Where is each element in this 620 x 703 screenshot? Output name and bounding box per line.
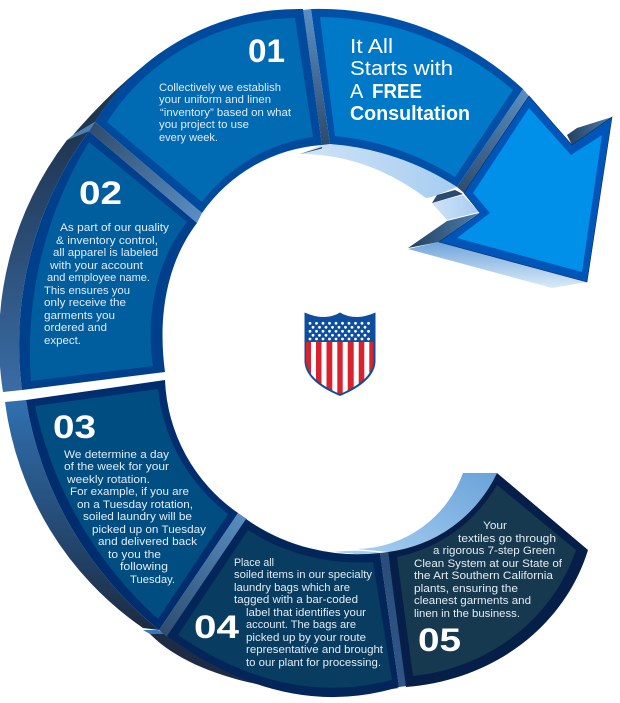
- heading: free consultation: Consultation: [350, 103, 470, 125]
- panel: step 04: [167, 519, 399, 697]
- text: step 03: of the week for your: [64, 461, 169, 473]
- step number 04: 04: [194, 609, 239, 645]
- text: step 05: cleanest garments and: [414, 595, 531, 607]
- text: step 02: expect.: [44, 335, 81, 347]
- text: step 03: For example, if you are: [70, 486, 189, 498]
- text: step 01: [159, 82, 292, 144]
- text: step 05: Clean System at our State of: [414, 558, 563, 570]
- step number 05: 05: [418, 622, 461, 658]
- text: step 04: [234, 557, 384, 669]
- text: step 02: all apparel is labeled: [53, 247, 158, 259]
- text: step 03: picked up on Tuesday: [92, 524, 206, 536]
- text: step 04: account. The bags are: [246, 619, 356, 631]
- text: step 02: This ensures you: [44, 285, 130, 297]
- text: step 05: [414, 520, 563, 620]
- text: step 02: [44, 222, 169, 347]
- text: step 04: soiled items in our specialty: [234, 569, 372, 581]
- arrow head: [439, 96, 612, 282]
- text: step 03: [64, 449, 206, 586]
- heading: free consultation: Starts with: [350, 58, 453, 80]
- heading: free consultation: FREE: [372, 81, 422, 103]
- text: step 04: label that identifies your: [246, 607, 366, 619]
- text: step 01: “inventory” based on what: [160, 107, 292, 119]
- panel: step 02: [19, 131, 197, 390]
- text: step 03: We determine a day: [64, 449, 169, 461]
- text: step 03: on a Tuesday rotation,: [77, 499, 193, 511]
- text: step 02: ordered and: [44, 322, 107, 334]
- text: step 05: plants, ensuring the: [414, 583, 518, 595]
- text: step 02: As part of our quality: [60, 222, 169, 234]
- text: step 04: picked up by your route: [246, 632, 366, 644]
- text: step 03: weekly rotation.: [66, 474, 150, 486]
- text: step 03: Tuesday.: [130, 574, 175, 586]
- step number 02: 02: [79, 175, 122, 211]
- panel: step 03: [26, 380, 238, 630]
- text: step 03: to you the: [108, 549, 161, 561]
- text: step 04: representative and brought: [246, 644, 384, 656]
- text: step 05: a rigorous 7-step Green: [433, 545, 555, 557]
- text: step 01: your uniform and linen: [159, 94, 271, 106]
- text: step 03: following: [120, 561, 168, 573]
- panel: free consultation: [311, 9, 523, 187]
- text: step 04: to our plant for processing.: [246, 657, 381, 669]
- text: step 04: tagged with a bar-coded: [234, 594, 358, 606]
- panel: step 05: [388, 473, 588, 687]
- text: step 05: the Art Southern California: [414, 570, 554, 582]
- heading: free consultation: [350, 36, 470, 125]
- text: step 02: only receive the: [44, 297, 126, 309]
- text: step 02: with your account: [49, 260, 144, 272]
- connectors between segments: [89, 9, 529, 687]
- icon: american flag shield: [304, 312, 376, 396]
- heading: free consultation: It All: [350, 36, 393, 58]
- text: step 03: soiled laundry will be: [83, 511, 192, 523]
- text: step 01: every week.: [159, 132, 218, 144]
- step number 03: 03: [53, 409, 96, 445]
- heading: free consultation: A: [350, 81, 364, 103]
- text: step 02: & inventory control,: [56, 235, 158, 247]
- text: step 04: Place all: [234, 557, 274, 569]
- text: step 05: linen in the business.: [414, 608, 520, 620]
- text: step 02: and employee name.: [47, 272, 150, 284]
- text: step 04: laundry bags which are: [234, 582, 350, 594]
- inner light walls: [300, 117, 612, 556]
- outer wall: top and left side: [0, 65, 399, 692]
- text: step 01: you project to use: [159, 119, 249, 131]
- step number 01: 01: [248, 33, 285, 69]
- panel: step 01: [95, 9, 322, 213]
- text: step 01: Collectively we establish: [159, 82, 281, 94]
- text: step 03: and delivered back: [98, 536, 197, 548]
- text: step 05: Your: [483, 520, 507, 532]
- text: step 02: garments you: [44, 310, 115, 322]
- text: step 05: textiles go through: [458, 533, 556, 545]
